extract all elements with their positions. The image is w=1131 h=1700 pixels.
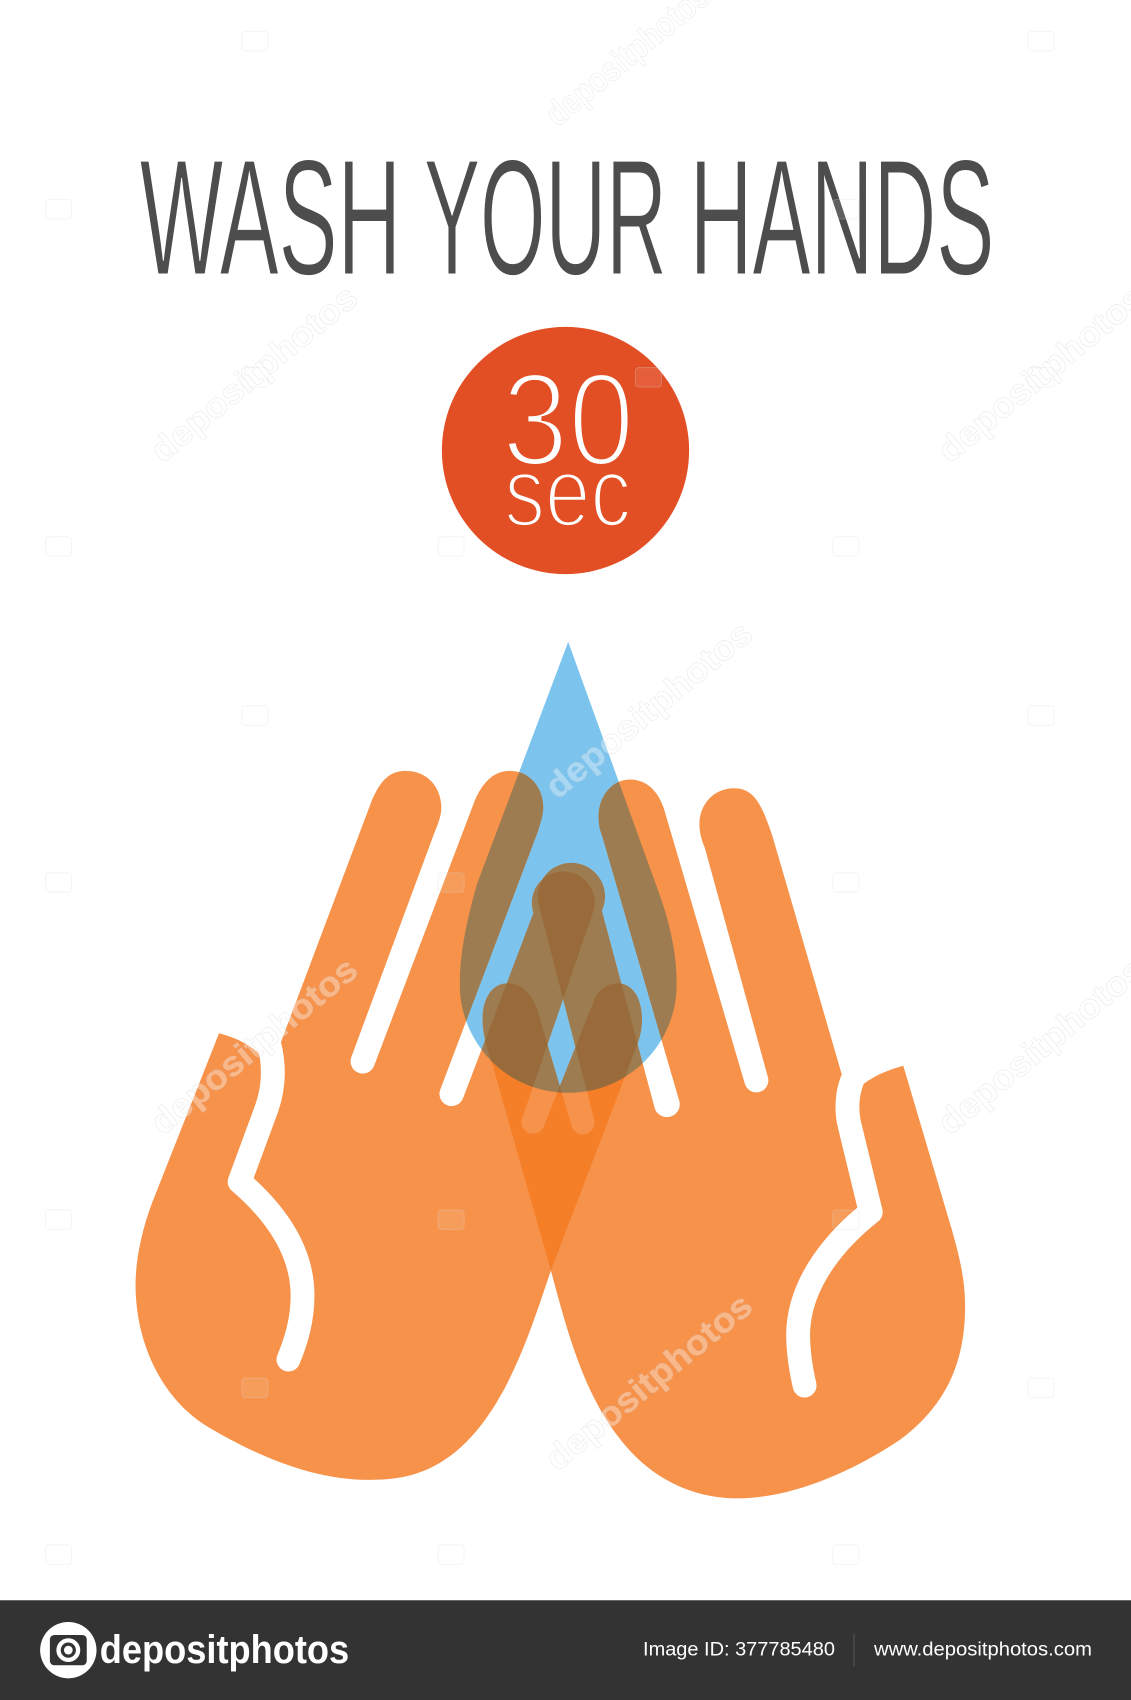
overlap of the two hands [491, 1061, 625, 1271]
website: www.depositphotos.com [873, 1639, 1092, 1661]
divider [853, 1634, 854, 1666]
timer badge: 30 sec [442, 327, 689, 574]
watermarks [144, 0, 1131, 1478]
image id: Image ID: 377785480 [643, 1639, 835, 1661]
watermarks: depositphotos [144, 278, 365, 470]
water drop and hands illustration [136, 642, 965, 1498]
right palm line [798, 1071, 871, 1386]
title: YOUR [424, 125, 667, 309]
left hand [136, 771, 642, 1480]
title: WASH [140, 125, 401, 309]
right hand [483, 780, 965, 1498]
left palm line [240, 1043, 303, 1360]
watermarks: depositphotos [538, 1286, 760, 1478]
timer unit: sec [504, 437, 631, 548]
timer number: 30 [502, 346, 634, 494]
icon: camera logo [40, 1622, 97, 1678]
logo wordmark: depositphotos [100, 1628, 349, 1672]
icon: water drop [460, 642, 677, 1093]
footer bar [0, 1600, 1131, 1700]
title [140, 125, 994, 309]
watermarks: depositphotos [538, 614, 760, 806]
hands seen through the water drop [460, 772, 676, 1093]
watermarks: depositphotos [144, 950, 365, 1142]
